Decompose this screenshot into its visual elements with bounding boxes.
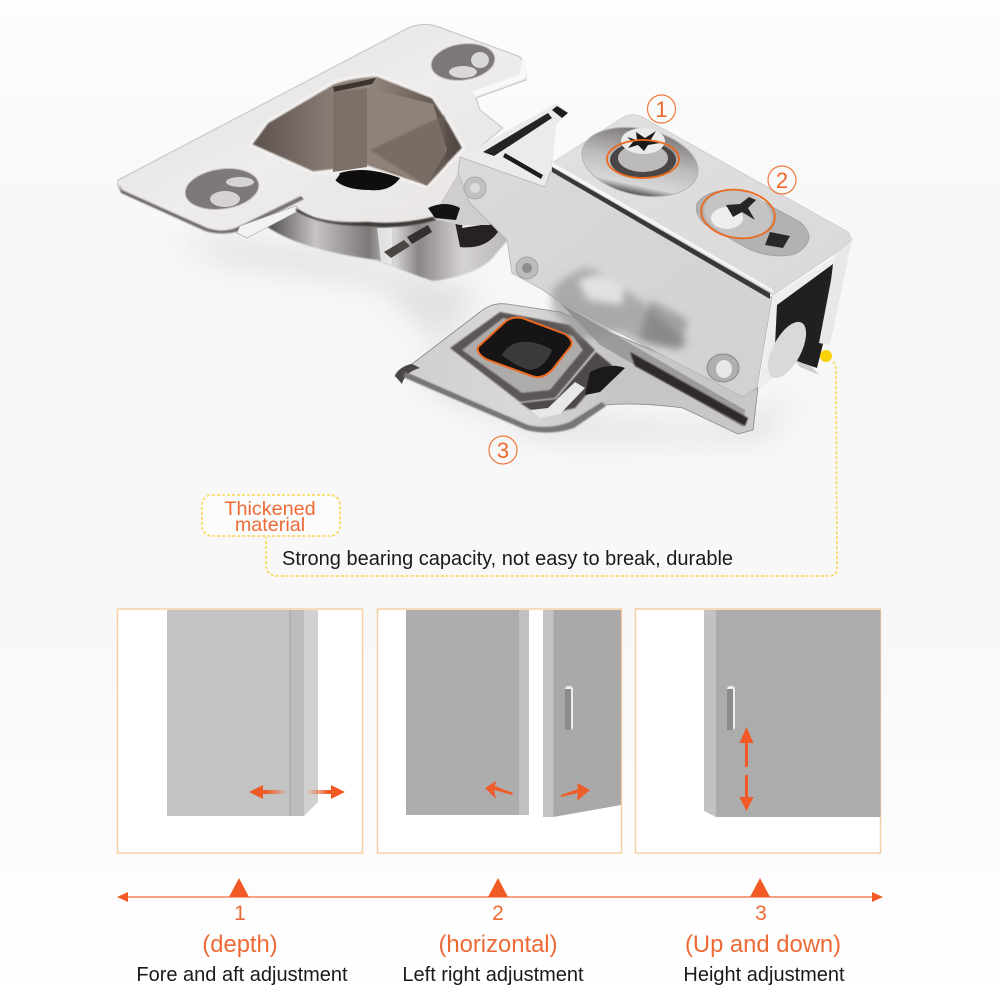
screw hole left — [183, 164, 261, 214]
caption: Fore and aft adjustment — [136, 964, 348, 986]
label box — [202, 495, 340, 536]
sliding arm link — [460, 103, 568, 187]
column 2: horizontal — [402, 878, 584, 986]
callout number 2 — [768, 166, 796, 194]
callout number 1: 1 — [655, 97, 668, 122]
left door — [406, 610, 519, 815]
leader dot — [820, 350, 832, 362]
panel 2: horizontal adjustment diagram — [378, 609, 622, 853]
orange heading: (depth) — [202, 931, 278, 958]
description text: Strong bearing capacity, not easy to break, durable — [282, 548, 733, 570]
caption: Height adjustment — [683, 964, 845, 986]
callout number 3: 3 — [497, 438, 509, 463]
number: 1 — [234, 902, 246, 925]
number: 3 — [755, 902, 767, 925]
adjustment screw 1 — [575, 117, 705, 207]
hinge cup body — [266, 195, 512, 281]
hinge arm top face — [552, 115, 852, 299]
door edge — [704, 610, 716, 817]
hinge arm side face — [458, 157, 772, 397]
marker triangle — [750, 878, 770, 897]
door handle — [565, 686, 573, 730]
callout number 3 — [489, 436, 517, 464]
arrow right — [308, 785, 345, 799]
caption: Left right adjustment — [402, 964, 584, 986]
orange ring 3 — [478, 318, 572, 377]
orange heading: (Up and down) — [685, 931, 841, 958]
product photo: concealed hinge — [118, 24, 852, 464]
arrow left — [485, 781, 513, 799]
leader dashed line — [266, 362, 837, 576]
marker triangle — [488, 878, 508, 897]
panel 1: depth adjustment diagram — [118, 609, 362, 853]
callout: thickened material — [202, 350, 837, 576]
marker triangle — [229, 878, 249, 897]
black gap at joint — [428, 204, 460, 220]
door side — [304, 610, 318, 816]
panel 3: height adjustment diagram — [636, 609, 880, 853]
chrome joint behind arm — [405, 150, 505, 225]
arm open end — [758, 240, 852, 390]
double arrow vertical — [740, 727, 754, 811]
callout number 2: 2 — [776, 168, 788, 193]
door front — [716, 610, 880, 817]
label text: Thickened — [224, 498, 316, 520]
lower base plate — [395, 303, 758, 434]
callout number 1 — [648, 95, 676, 123]
adjustment axis line — [117, 892, 883, 902]
cup recess — [250, 75, 464, 210]
number: 2 — [492, 902, 504, 925]
hinge soft shadow — [175, 235, 800, 440]
column 1: depth — [136, 878, 348, 986]
arrow right — [561, 783, 590, 801]
arrow left — [249, 785, 286, 799]
column 3: up and down — [683, 878, 845, 986]
adjustment screw 2 — [696, 184, 809, 256]
mounting plate — [118, 24, 526, 238]
door edge — [290, 610, 304, 816]
screw hole right — [429, 40, 497, 84]
right door — [554, 610, 621, 817]
orange heading: (horizontal) — [438, 931, 558, 958]
door front — [167, 610, 290, 816]
label text: material — [235, 514, 305, 536]
door handle — [727, 686, 735, 730]
